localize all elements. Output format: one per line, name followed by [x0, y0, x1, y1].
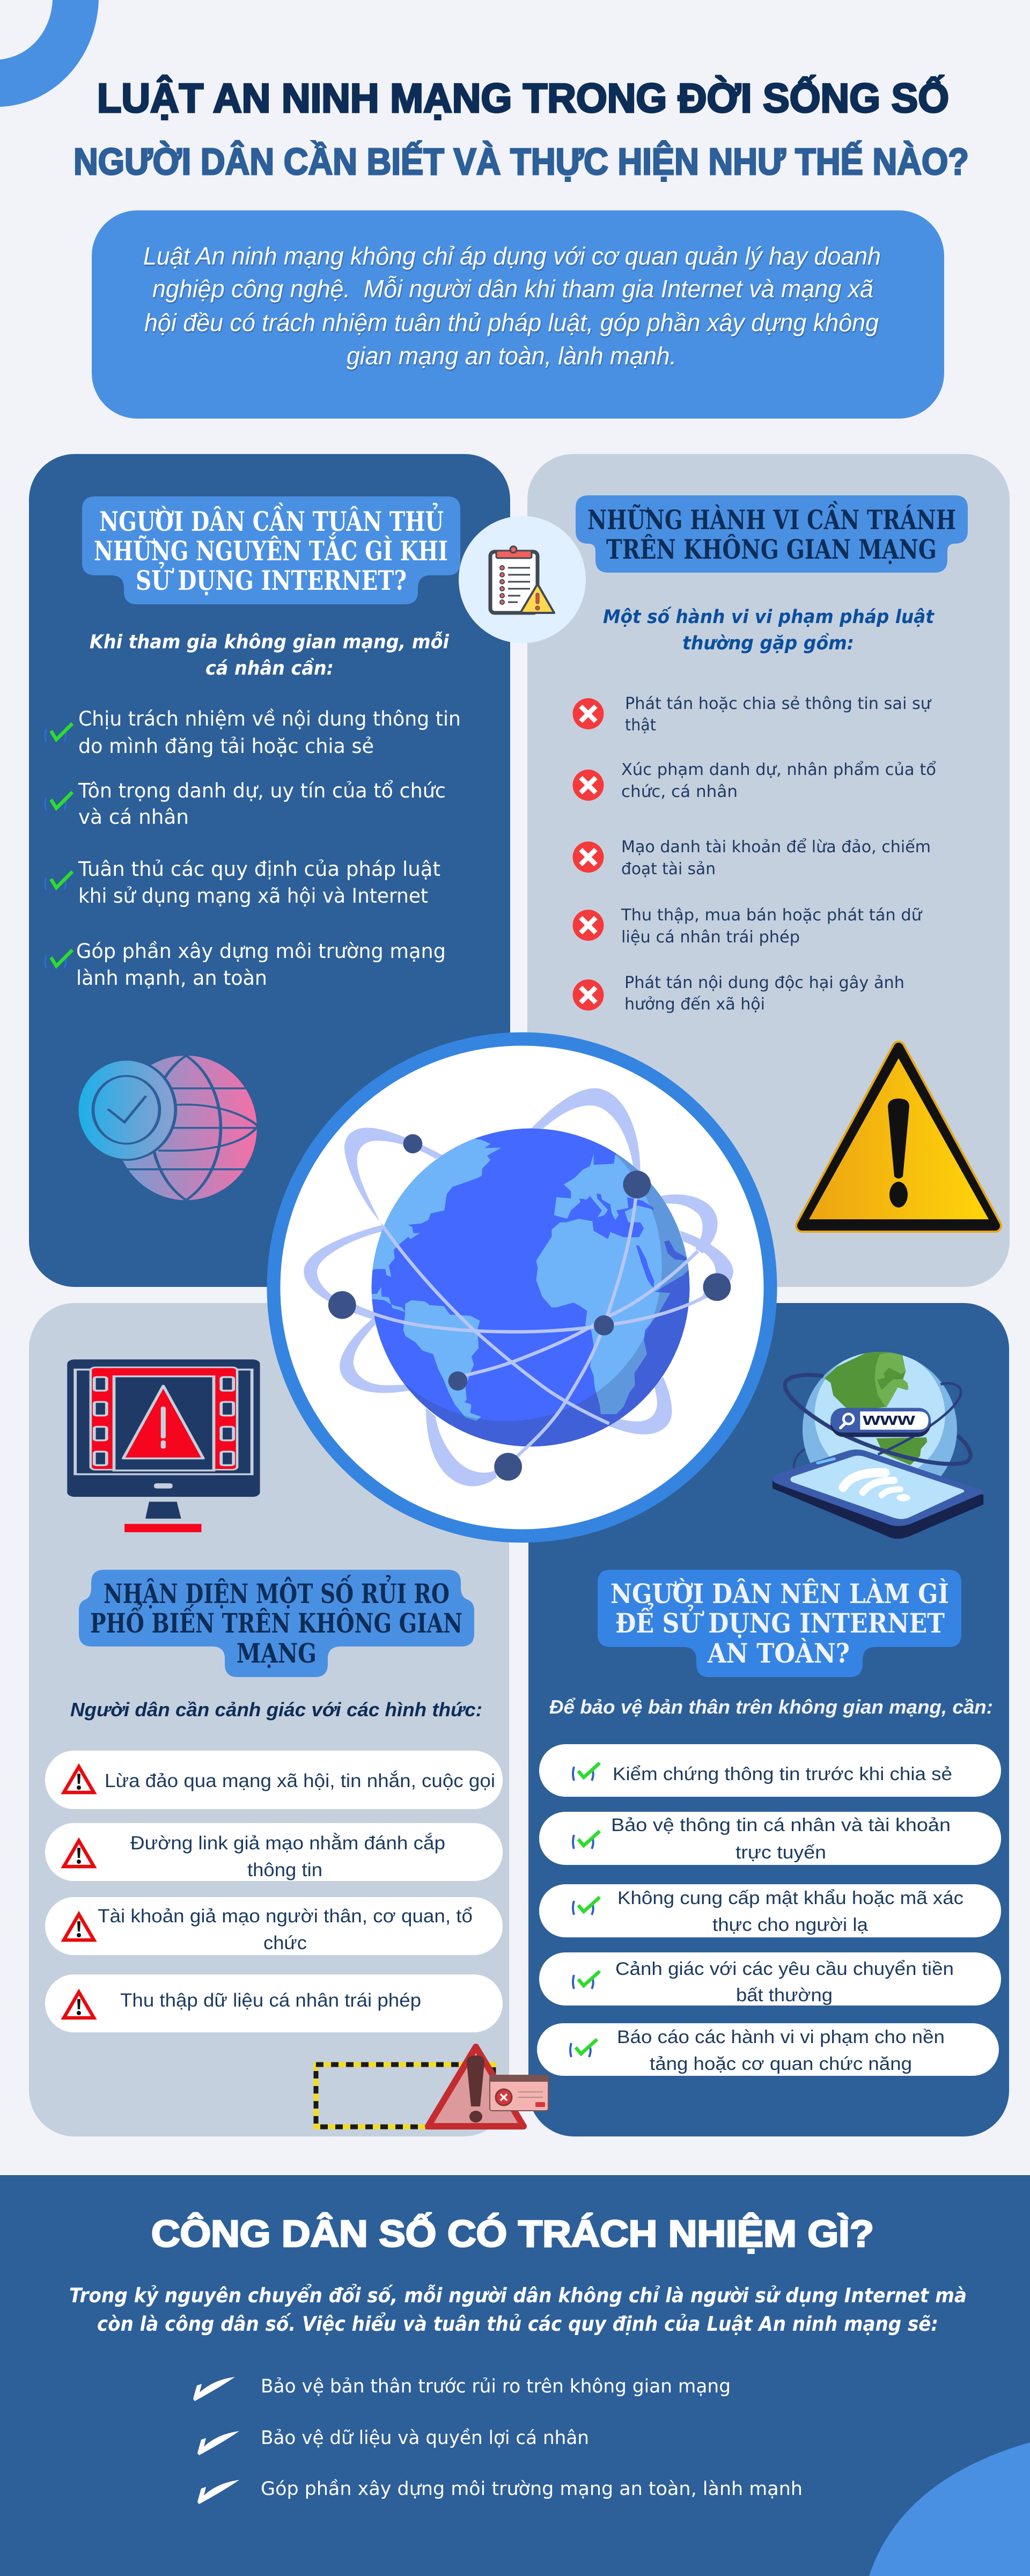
decorative quarter ring top-left: [0, 0, 99, 107]
icon: clipboard warning badge: [459, 516, 586, 643]
heading: risks: PHỔ BIẾN TRÊN KHÔNG GIAN: [90, 1602, 462, 1639]
panel: safe usage: [528, 1303, 1009, 2136]
heading: risks: NHẬN DIỆN MỘT SỐ RỦI RO: [104, 1574, 450, 1609]
risk pill list: Thu thập dữ liệu cá nhân trái phép: [120, 1990, 421, 2011]
heading: safe usage: [598, 1570, 961, 1677]
safe usage pill list: Không cung cấp mật khẩu hoặc mã xác: [617, 1888, 963, 1908]
intro callout: Luật An ninh mạng không chỉ áp dụng với cơ quan quản lý hay doanh: [143, 242, 881, 270]
footer checklist: [193, 2376, 803, 2504]
icon: globe www tablet: [772, 1349, 983, 1539]
safe usage pill list: Báo cáo các hành vi vi phạm cho nền: [617, 2027, 945, 2047]
heading: safe usage: NGƯỜI DÂN NÊN LÀM GÌ: [610, 1578, 949, 1609]
risk pill list: Lừa đảo qua mạng xã hội, tin nhắn, cuộc gọi: [105, 1770, 495, 1791]
checklist: principles: Tôn trọng danh dự, uy tín của tổ chức: [78, 779, 446, 802]
footer checklist: Góp phần xây dựng môi trường mạng an toàn, lành mạnh: [261, 2478, 803, 2500]
violation list: Xúc phạm danh dự, nhân phẩm của tổ: [621, 760, 936, 779]
checklist: principles: lành mạnh, an toàn: [76, 967, 267, 990]
checklist: principles: [45, 707, 461, 990]
heading: behaviours to avoid: [576, 495, 968, 573]
subtitle: principles: Khi tham gia không gian mạng, mỗi: [90, 631, 450, 653]
safe usage pill list: Bảo vệ thông tin cá nhân và tài khoản: [611, 1815, 951, 1835]
safe usage pill list: bất thường: [736, 1985, 833, 2006]
risk pill list: [45, 1751, 503, 2032]
safe usage pill list: Cảnh giác với các yêu cầu chuyển tiền: [615, 1959, 954, 1979]
footer heading: CÔNG DÂN SỐ CÓ TRÁCH NHIỆM GÌ?: [151, 2212, 874, 2255]
checklist: principles: Tuân thủ các quy định của pháp luật: [78, 858, 440, 881]
heading: safe usage: ĐỂ SỬ DỤNG INTERNET: [615, 1602, 945, 1639]
subtitle: principles: cá nhân cần:: [205, 657, 334, 679]
footer intro: [69, 2284, 967, 2336]
panel: citizen principles: [29, 454, 510, 1287]
safe usage pill list: Kiểm chứng thông tin trước khi chia sẻ: [613, 1764, 952, 1784]
risk pill list: chức: [263, 1933, 307, 1953]
intro callout: [92, 210, 944, 419]
title: [73, 75, 969, 182]
heading: risks: MẠNG: [237, 1637, 317, 1669]
intro callout: gian mạng an toàn, lành mạnh.: [347, 342, 676, 370]
checklist: principles: Góp phần xây dựng môi trường mạng: [76, 940, 446, 963]
violation list: [573, 694, 936, 1014]
panel: risks: [29, 1303, 509, 2136]
icon: hazard frame with warning triangle and error window: [316, 2047, 548, 2127]
violation list: Phát tán nội dung độc hại gây ảnh: [624, 974, 904, 992]
heading: risks: [79, 1570, 474, 1677]
heading: safe usage: AN TOÀN?: [707, 1637, 850, 1669]
central globe medallion: [274, 1039, 770, 1536]
checklist: principles: do mình đăng tải hoặc chia sẻ: [78, 735, 374, 758]
checklist: principles: và cá nhân: [78, 806, 189, 829]
panel: behaviours to avoid: [527, 454, 1010, 1287]
intro callout: nghiệp công nghệ. Mỗi người dân khi tham gia Internet và mạng xã: [152, 275, 873, 303]
heading: principles: NHỮNG NGUYÊN TẮC GÌ KHI: [94, 531, 448, 567]
violation list: đoạt tài sản: [621, 860, 716, 879]
footer checklist: Bảo vệ bản thân trước rủi ro trên không gian mạng: [261, 2376, 731, 2397]
orbit lines over globe: [355, 1196, 705, 1460]
violation list: Phát tán hoặc chia sẻ thông tin sai sự: [625, 694, 932, 713]
heading: principles: SỬ DỤNG INTERNET?: [136, 561, 407, 596]
risk pill list: Đường link giả mạo nhằm đánh cắp: [130, 1833, 445, 1854]
decorative corner shape: [869, 2442, 1030, 2576]
subtitle: principles: [90, 631, 450, 679]
heading: principles: [82, 496, 460, 604]
orbit nodes: [328, 1134, 731, 1481]
risk pill list: thông tin: [247, 1860, 322, 1880]
subtitle: safe usage: Để bảo vệ bản thân trên không gian mạng, cần:: [549, 1696, 993, 1718]
footer panel: [0, 2175, 1030, 2576]
icon: monitor alert: [67, 1359, 260, 1532]
subtitle: risks: Người dân cần cảnh giác với các hình thức:: [70, 1699, 482, 1721]
icon: globe www tablet: www: [862, 1409, 915, 1429]
icon: warning triangle: [802, 1048, 995, 1226]
footer intro: Trong kỷ nguyên chuyển đổi số, mỗi người dân không chỉ là người sử dụng Internet mà: [69, 2284, 967, 2307]
safe usage pill list: [537, 1744, 1001, 2076]
violation list: thật: [625, 716, 656, 735]
violation list: hưởng đến xã hội: [624, 995, 765, 1014]
subtitle: behaviours to avoid: thường gặp gồm:: [682, 633, 854, 654]
violation list: chức, cá nhân: [621, 782, 738, 801]
heading: principles: NGƯỜI DÂN CẦN TUÂN THỦ: [99, 502, 444, 537]
safe usage pill list: tảng hoặc cơ quan chức năng: [650, 2054, 912, 2074]
footer intro: còn là công dân số. Việc hiểu và tuân thủ các quy định của Luật An ninh mạng sẽ:: [97, 2312, 938, 2336]
title: LUẬT AN NINH MẠNG TRONG ĐỜI SỐNG SỐ: [97, 75, 949, 121]
violation list: Mạo danh tài khoản để lừa đảo, chiếm: [621, 837, 931, 857]
risk pill list: Tài khoản giả mạo người thân, cơ quan, tổ: [98, 1906, 473, 1927]
orbit loops behind globe: [304, 1088, 733, 1486]
icon: gradient globe with check badge: [77, 1056, 258, 1200]
heading: behaviours to avoid: TRÊN KHÔNG GIAN MẠNG: [606, 533, 937, 565]
globe sphere: [371, 1128, 690, 1447]
safe usage pill list: trực tuyến: [735, 1842, 826, 1863]
subtitle: behaviours to avoid: [603, 606, 935, 654]
footer checklist: Bảo vệ dữ liệu và quyền lợi cá nhân: [261, 2427, 589, 2449]
checklist: principles: Chịu trách nhiệm về nội dung thông tin: [78, 707, 461, 730]
violation list: liệu cá nhân trái phép: [621, 928, 800, 947]
subtitle: behaviours to avoid: Một số hành vi vi phạm pháp luật: [603, 606, 935, 628]
checklist: principles: khi sử dụng mạng xã hội và Internet: [78, 884, 428, 908]
violation list: Thu thập, mua bán hoặc phát tán dữ: [621, 906, 923, 925]
safe usage pill list: thực cho người lạ: [712, 1915, 868, 1935]
intro callout: hội đều có trách nhiệm tuân thủ pháp luật, góp phần xây dựng không: [144, 309, 879, 336]
